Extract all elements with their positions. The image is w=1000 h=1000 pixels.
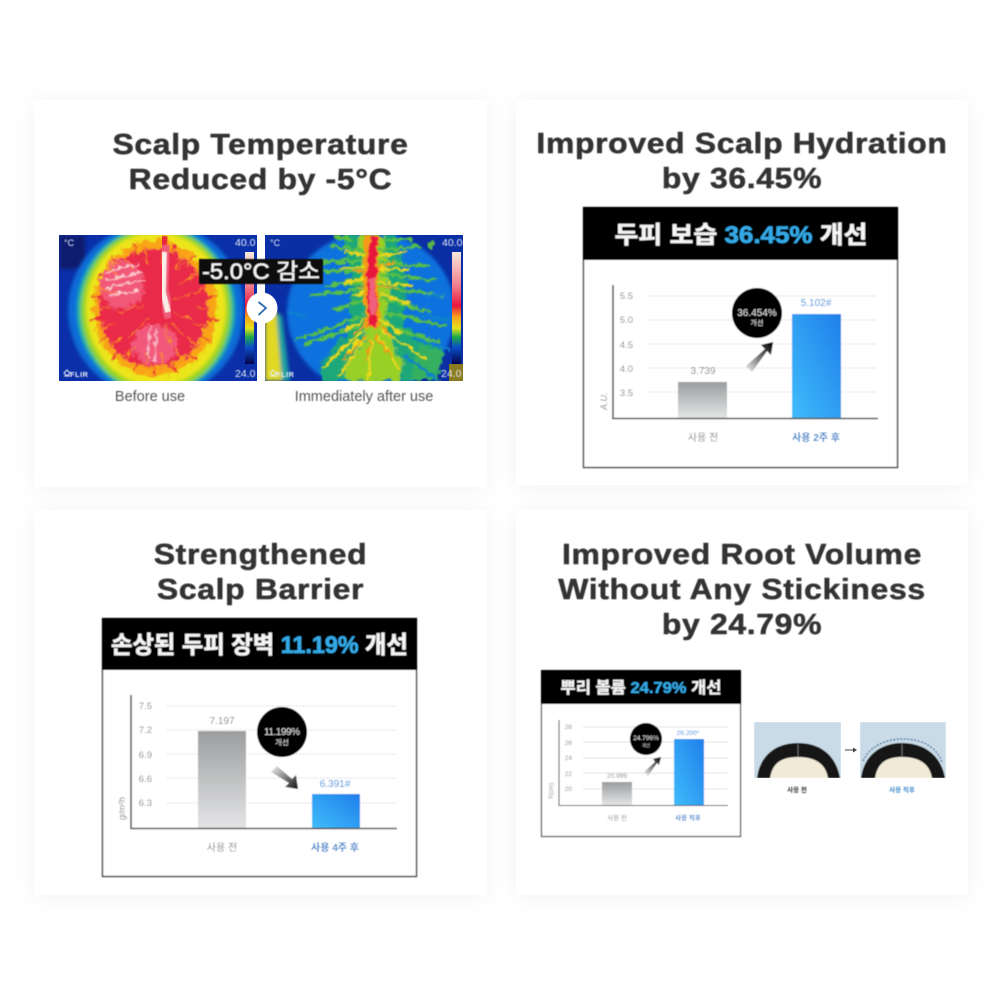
arrow: increase (644, 757, 661, 776)
chart: scalp barrier: 6.9 (139, 750, 152, 761)
arrow: before to after (845, 748, 857, 752)
readouts: °C (270, 238, 281, 248)
arrow: increase (746, 342, 773, 372)
arrow: decrease (271, 766, 298, 789)
readouts: FLIR (276, 370, 294, 379)
chart: scalp barrier: 7.197 (209, 716, 235, 727)
chart: scalp hydration: 5.0 (620, 315, 633, 326)
chart: scalp barrier (102, 618, 417, 876)
chart: scalp hydration: 3.739 (690, 366, 716, 377)
chart: scalp barrier: 사용 4주 후 (311, 841, 359, 854)
chart: scalp hydration: 5.102# (801, 298, 832, 309)
chart header: 두피 보습 36.45% 개선 (614, 222, 868, 249)
chart: root volume: 22 (565, 771, 572, 778)
panel: scalp hydration (516, 100, 968, 485)
bubble: 36.454% (737, 308, 777, 319)
chart: root volume: 사용 전 (607, 813, 627, 822)
heading: scalp hydration: Improved Scalp Hydration (536, 128, 948, 160)
thermal image: immediately after use (265, 232, 463, 392)
readouts (64, 237, 256, 380)
chart: scalp barrier: 7.5 (139, 701, 152, 712)
heading: root volume: Improved Root Volume (562, 539, 922, 571)
chart: scalp barrier: g/m²h (117, 797, 127, 820)
icon: chevron button (246, 292, 278, 324)
bubble (630, 723, 662, 755)
color scale (245, 252, 254, 364)
chart: root volume: 20 (565, 786, 572, 793)
heading: scalp temperature: Reduced by -5°C (129, 164, 392, 196)
panel: scalp temperature (34, 100, 487, 487)
chart: scalp hydration: 사용 2주 후 (792, 431, 840, 444)
heading: scalp hydration: by 36.45% (662, 163, 822, 195)
chart: root volume: 24 (565, 755, 572, 762)
heading: scalp temperature (112, 129, 409, 196)
color scale (452, 252, 461, 364)
chart: scalp barrier: 6.3 (139, 798, 152, 809)
chart: root volume: 28 (565, 724, 572, 731)
readouts: 40.0 (442, 237, 463, 249)
panel: scalp barrier (34, 510, 487, 895)
readouts: 40.0 (235, 237, 256, 249)
temperature callout: -5.0°C 감소 (202, 259, 320, 284)
readouts (270, 237, 463, 380)
caption: immediately after use: Immediately after use (295, 389, 433, 405)
chart: root volume (541, 670, 741, 836)
photo: hair before use (754, 722, 841, 778)
readouts: FLIR (70, 370, 88, 379)
chart: scalp barrier: 6.391# (320, 779, 351, 790)
bubble (257, 707, 307, 757)
chart header: 손상된 두피 장벽 11.19% 개선 (111, 632, 408, 659)
chart: root volume: 사용 직후 (675, 813, 701, 822)
chart header: 뿌리 볼륨 24.79% 개선 (560, 679, 722, 697)
chart: scalp hydration (583, 207, 898, 468)
chart: scalp hydration: 4.5 (620, 340, 633, 351)
thermal image: before use (59, 235, 257, 381)
chart: scalp hydration: 5.5 (620, 291, 633, 302)
bubble (732, 288, 782, 338)
heading: root volume: Without Any Stickiness (558, 574, 926, 606)
panel: root volume (516, 510, 968, 895)
chart: root volume: 26 (565, 740, 572, 747)
chart: scalp hydration: 4.0 (620, 364, 633, 375)
chart: scalp barrier: 7.2 (139, 725, 152, 736)
chart: root volume: 20.999 (607, 773, 627, 780)
chart: scalp hydration: A.U. (599, 392, 609, 411)
bubble: 개선 (642, 742, 650, 749)
heading: scalp hydration (536, 128, 948, 196)
bubble: 개선 (751, 318, 763, 327)
heading: root volume: by 24.79% (662, 609, 822, 641)
chart: scalp barrier: 6.6 (139, 774, 152, 785)
chart: scalp hydration: 사용 전 (688, 432, 718, 444)
readouts: °C (64, 238, 75, 248)
caption: before use: Before use (115, 389, 185, 405)
heading: scalp temperature: Scalp Temperature (112, 129, 409, 161)
heading: scalp barrier: Strengthened (154, 539, 367, 571)
chart: root volume: 26.200* (677, 730, 700, 737)
readouts: 24.0 (441, 368, 462, 380)
heading: scalp barrier (154, 539, 367, 606)
caption: hair before: 사용 전 (787, 785, 807, 794)
photo: hair after use (860, 722, 946, 778)
chart: scalp hydration: 3.5 (620, 388, 633, 399)
readouts: 24.0 (235, 368, 256, 380)
bubble: 개선 (275, 737, 289, 747)
chart: root volume: R(cm) (549, 783, 555, 799)
chart: scalp barrier: 사용 전 (207, 842, 237, 854)
bubble: 24.796% (633, 735, 659, 742)
caption: hair after: 사용 직후 (889, 785, 915, 794)
heading: scalp barrier: Scalp Barrier (157, 574, 364, 606)
bubble: 11.199% (264, 727, 300, 738)
heading: root volume (557, 539, 926, 642)
